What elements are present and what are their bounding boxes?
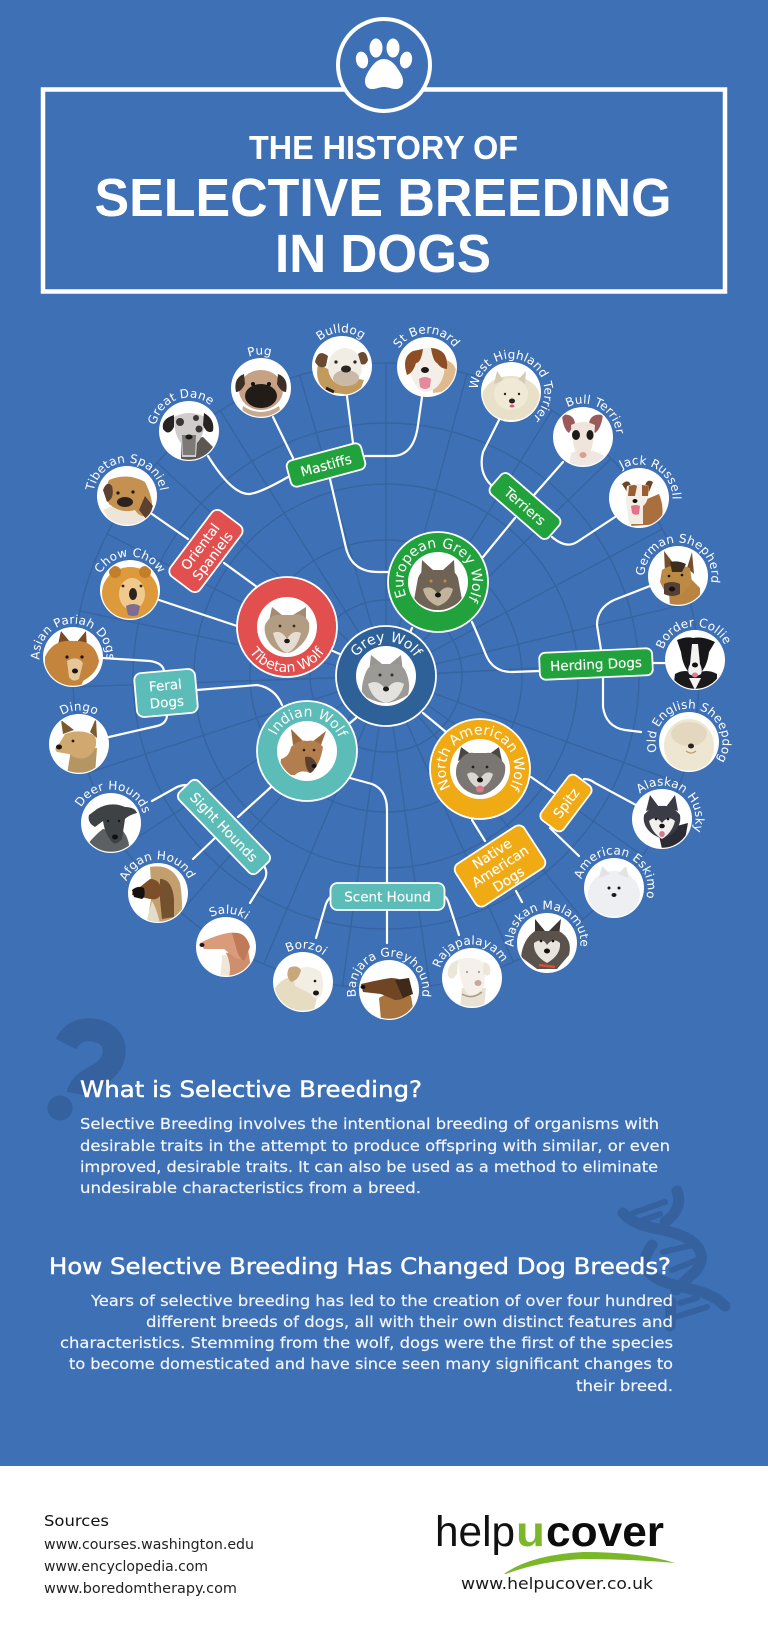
label: West Highland Terrier (468, 350, 554, 422)
box: Sight Hounds (175, 777, 273, 877)
title: IN DOGS (275, 224, 491, 284)
dog: Borzoi (273, 942, 333, 1012)
icon: st bernard portrait (405, 348, 457, 393)
label: Banjara Greyhound (346, 948, 432, 996)
icon: bulldog portrait (315, 348, 368, 396)
box: Feral Dogs (134, 668, 198, 718)
icon: jack russell portrait (622, 481, 663, 526)
wolf node: Tibetan Wolf (236, 576, 338, 678)
box: Mastiffs: Mastiffs (299, 451, 354, 480)
label: Rajapalayam (432, 935, 506, 968)
box: Scent Hound: Scent Hound (344, 890, 431, 906)
icon: border collie portrait (673, 637, 717, 690)
logo: helpucover: www.helpucover.co.uk (461, 1574, 654, 1593)
icon: deerhound portrait (88, 804, 137, 852)
label: Grey Wolf (351, 632, 424, 656)
box: Mastiffs (285, 442, 367, 488)
sources: www.boredomtherapy.com (44, 1581, 237, 1597)
heading: what is selective breeding: What is Selective Breeding? (80, 1078, 422, 1103)
icon: bull terrier portrait (562, 415, 609, 469)
icon: tibetan spaniel portrait (103, 476, 153, 526)
dog: Asian Pariah Dogs (30, 614, 114, 687)
label: Tibetan Spaniel (85, 454, 169, 490)
label: Asian Pariah Dogs (30, 614, 114, 660)
label: Jack Russell (618, 455, 682, 498)
box: Terriers (487, 471, 563, 541)
label: St Bernard (393, 326, 460, 348)
box: Oriental Spaniels (167, 507, 245, 595)
icon: saluki portrait (200, 933, 252, 977)
footer panel (0, 1466, 768, 1643)
dog: Pug (231, 347, 291, 418)
sources (44, 1512, 254, 1597)
dog: Border Collie (656, 618, 730, 690)
dog: Great Dane (148, 389, 219, 461)
dog: Old English Sheepdog (646, 699, 732, 772)
box: Oriental Spaniels: Spaniels (190, 529, 237, 584)
text block: what is selective breeding: improved, desirable traits. It can also be used as a method to eliminate (80, 1158, 658, 1176)
label: Pug (248, 347, 271, 358)
box: Native American Dogs: American (469, 843, 532, 891)
icon: DNA watermark (623, 1191, 725, 1326)
label: Afgan Hound (120, 850, 196, 882)
dog: Saluki (196, 904, 256, 977)
dog: Banjara Greyhound (346, 948, 432, 1020)
box: Spitz: Spitz (550, 785, 583, 822)
label: European Grey Wolf (394, 538, 484, 604)
text block: what is selective breeding: desirable traits in the attempt to produce offspring with similar, or even (80, 1137, 670, 1155)
radial grid background (73, 363, 699, 989)
dog: Bull Terrier (553, 394, 624, 467)
box: Oriental Spaniels: Oriental (178, 521, 223, 574)
text block: what is selective breeding: undesirable characteristics from a breed. (80, 1179, 421, 1197)
icon: asian pariah dog portrait (45, 631, 99, 687)
icon: great dane portrait (163, 413, 215, 461)
icon: indian wolf portrait (279, 729, 326, 775)
wolf node: Indian Wolf (256, 700, 358, 802)
dog: St Bernard (393, 326, 460, 397)
icon: banjara greyhound portrait (360, 978, 415, 1020)
label: Borzoi (285, 942, 328, 955)
dog: Rajapalayam (432, 935, 506, 1008)
dog: Jack Russell (609, 455, 682, 528)
icon: paw badge (338, 19, 430, 111)
logo: helpucover: cover (546, 1508, 664, 1556)
dog: Afgan Hound (120, 850, 196, 923)
dog: American Eskimo (574, 846, 654, 918)
text block: how selective breeding changed dogs: to become domesticated and have since seen many significant changes to (69, 1355, 673, 1373)
text block: how selective breeding changed dogs: different breeds of dogs, all with their own distinct features and (146, 1313, 673, 1331)
logo: helpucover: help (435, 1508, 515, 1556)
icon: west highland terrier portrait (482, 371, 540, 420)
text block: what is selective breeding (80, 1115, 670, 1197)
label: Tibetan Wolf (252, 645, 324, 672)
dog: Deer Hounds (74, 780, 149, 853)
label: Chow Chow (95, 548, 164, 572)
label: Bulldog (316, 324, 365, 340)
icon: pug portrait (235, 370, 287, 420)
dog: German Shepherd (636, 534, 720, 606)
dog: Alaskan Malamute (504, 900, 588, 973)
dog: Alaskan Husky (632, 776, 705, 849)
box: Spitz (538, 772, 594, 834)
dog: West Highland Terrier (468, 350, 554, 422)
dog: Chow Chow (95, 548, 164, 620)
label: North American Wolf (436, 726, 526, 793)
label: Indian Wolf (268, 708, 349, 736)
icon: north american wolf portrait (456, 747, 505, 795)
icon: afghan hound portrait (132, 866, 182, 923)
text block: how selective breeding changed dogs: characteristics. Stemming from the wolf, dogs were the first of the species (60, 1334, 673, 1352)
box: Sight Hounds: Sight Hounds (186, 790, 260, 866)
box: Scent Hound (330, 883, 444, 910)
box: Terriers: Terriers (500, 484, 548, 529)
label: Dingo (60, 702, 98, 714)
dog: Dingo (49, 702, 109, 774)
label: German Shepherd (636, 534, 720, 582)
logo: helpucover (435, 1508, 675, 1593)
label: Saluki (209, 904, 250, 920)
box: Feral Dogs: Dogs (149, 693, 185, 712)
icon: old english sheepdog portrait (664, 719, 714, 773)
text block: how selective breeding changed dogs: their breed. (576, 1377, 673, 1395)
icon: question mark watermark (53, 1030, 114, 1115)
label: Great Dane (148, 389, 213, 424)
connector lines of the family tree (103, 396, 666, 943)
sources: www.encyclopedia.com (44, 1559, 208, 1575)
box: Native American Dogs: Native (470, 836, 515, 873)
icon: alaskan malamute portrait (521, 919, 570, 969)
icon: tibetan wolf portrait (265, 607, 309, 653)
text block: how selective breeding changed dogs: Years of selective breeding has led to the creation of over four hundred (90, 1292, 673, 1310)
label: Bull Terrier (565, 394, 624, 434)
sources: www.courses.washington.edu (44, 1537, 254, 1553)
label: Deer Hounds (74, 780, 149, 813)
label: Old English Sheepdog (646, 699, 732, 762)
label: Alaskan Husky (638, 776, 705, 832)
title: SELECTIVE BREEDING (94, 168, 672, 228)
icon: european wolf portrait (414, 560, 462, 610)
label: Border Collie (656, 618, 730, 648)
label: American Eskimo (574, 846, 654, 898)
box: Native American Dogs (452, 823, 548, 909)
label: Alaskan Malamute (504, 900, 588, 947)
box: Feral Dogs: Feral (148, 677, 182, 695)
box: Herding Dogs (539, 648, 653, 680)
icon: grey wolf portrait (362, 655, 409, 703)
icon: chow chow portrait (102, 566, 158, 619)
title: THE HISTORY OF (249, 129, 518, 166)
heading: how selective breeding changed dogs: How Selective Breeding Has Changed Dog Breeds? (49, 1255, 671, 1280)
icon: german shepherd portrait (660, 551, 700, 606)
box: Native American Dogs: Dogs (490, 864, 528, 896)
icon: american eskimo portrait (588, 866, 640, 917)
wolf node: Grey Wolf (335, 625, 437, 727)
icon: dingo portrait (55, 718, 97, 774)
title frame (43, 90, 725, 292)
logo: helpucover: u (516, 1508, 545, 1556)
sources: Sources (44, 1512, 109, 1530)
dog: Bulldog (312, 324, 372, 396)
wolf node: North American Wolf (429, 718, 531, 820)
icon: rajapalayam portrait (448, 958, 490, 1008)
title (94, 129, 672, 284)
icon: alaskan husky portrait (644, 795, 688, 849)
dog: Tibetan Spaniel (85, 454, 169, 526)
icon: borzoi portrait (275, 966, 323, 1014)
text block: what is selective breeding: Selective Breeding involves the intentional breeding of organisms with (80, 1115, 659, 1133)
wolf node: European Grey Wolf (387, 531, 489, 633)
text block: how selective breeding changed dogs (60, 1292, 673, 1395)
box: Herding Dogs: Herding Dogs (550, 655, 642, 675)
